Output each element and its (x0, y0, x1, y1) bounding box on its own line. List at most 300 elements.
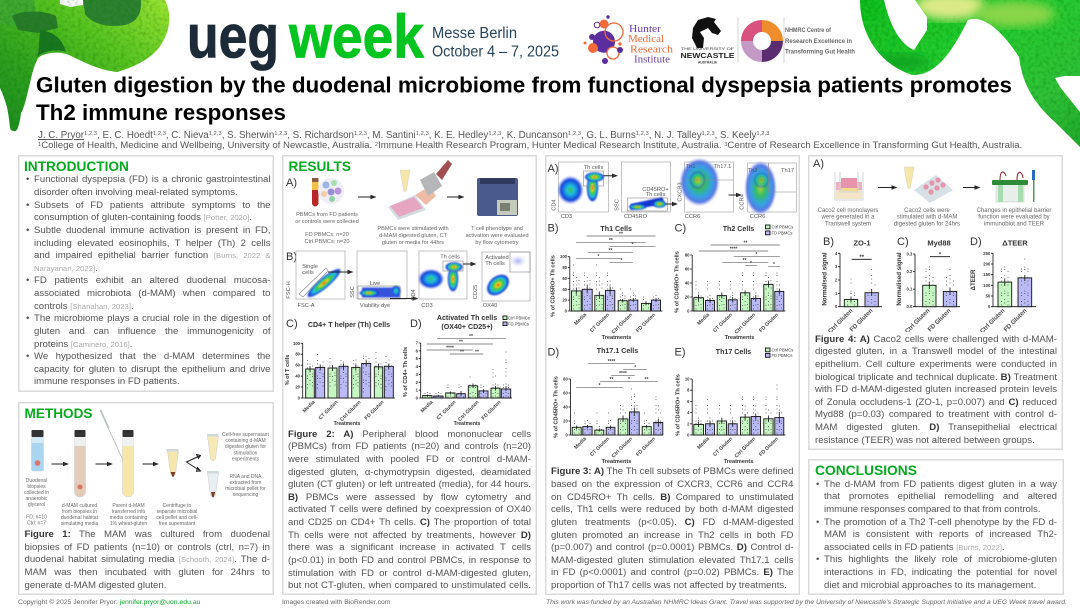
arrow (358, 196, 375, 198)
label: parent d-MAM: Parent d-MAM (112, 503, 144, 509)
bar chart: Th2 cells: CT Gluten (712, 312, 733, 334)
panel label B: B) (547, 222, 558, 234)
bar chart: Th2 cells: Treatments (724, 335, 754, 341)
bar chart: ZO-1: 3 (835, 264, 838, 269)
panel: figure 4 (808, 155, 1063, 450)
panel label B: B) (286, 251, 297, 263)
bar chart: Th17.1 cells (553, 347, 662, 465)
flow plot: live cells: SSC (350, 286, 356, 298)
text block: introduction bullets: proteins [Caminero, 2016]. (34, 339, 132, 350)
bar chart: Th17 cells: FD Gluten (758, 436, 779, 458)
bar chart: Th2 cells: FD Gluten (758, 312, 779, 334)
flow plot: SSC vs CD45RO (614, 162, 670, 220)
bar chart: delta TEER: 100 (983, 283, 991, 288)
bar chart: Th2 cells: 40 (684, 280, 690, 286)
bar chart: delta TEER: 150 (983, 272, 991, 277)
flow plot: CD4 vs CD3: CD4 (551, 199, 557, 211)
label: parent d-MAM: 1% wheat-gluten (109, 521, 147, 527)
flow plot: single cells (286, 251, 345, 309)
bar chart: ZO-1: Normalised signal (822, 252, 829, 306)
panel label B: B) (823, 236, 834, 248)
text block: figure 3 caption: on CD45RO+ Th cells. B) Compared to unstimulated (551, 492, 794, 503)
bar chart: CD4+ T helper cells: CT Gluten (318, 400, 339, 421)
logo: University of Newcastle: AUSTRALIA (698, 60, 718, 64)
label: biopsies: Duodenal (25, 478, 47, 484)
bar chart: activated Th cells: ** (469, 334, 473, 340)
arrow (463, 262, 475, 266)
panel label A: A) (813, 158, 824, 170)
text block: introduction bullets: Functional dyspepsia (FD) is a chronic gastrointestinal (34, 174, 270, 185)
bar chart: Th17.1 cells: ** (609, 377, 613, 383)
bar chart: activated Th cells: ** (460, 350, 464, 356)
bar chart: CD4+ T helper cells: Ctrl Gluten (339, 400, 362, 423)
bar chart: Th1 cells: * (631, 242, 633, 248)
bar chart: Th17 cells (675, 348, 785, 465)
text block: introduction bullets: immune responses in FD patients. (34, 376, 180, 387)
footer: copyright: Copyright © 2025 Jennifer Pryor: jennifer.pryor@uon.edu.au (18, 599, 200, 606)
logo: NHMRC Centre of Research Excellence: Research Excellence in (785, 38, 852, 45)
bar chart: Th2 cells: **** (729, 246, 737, 252)
arrow (390, 297, 417, 300)
text block: figure 2 caption: stimulation with FD or control d-MAM-digested gluten, (288, 568, 531, 579)
logo: NHMRC Centre of Research Excellence: NHMRC Centre of (785, 27, 832, 34)
flow plot: activated Th cells: OX40 (483, 303, 497, 309)
text block: introduction bullets: gluten and can influence the immunogenicity of (34, 326, 270, 337)
bar chart: Th1 cells: ** (608, 238, 612, 244)
bar chart: Myd88: 0.3 (906, 252, 913, 256)
text block: figure 3 caption: in FD (p<0.0001) and control (p=0.02) PBMCs. E) The (551, 567, 793, 578)
bar chart: Th2 cells: 20 (684, 294, 690, 300)
bar chart: activated Th cells: CT Gluten (436, 400, 457, 421)
bar chart: Th1 cells: 20 (562, 298, 567, 303)
flow plot: live cells: Live (370, 281, 380, 287)
text block: figure 3 caption: based on the expression of CXCR3, CCR6 and CCR4 (551, 479, 794, 490)
bar chart: Th2 cells: ** (743, 240, 747, 246)
affiliations: 1College of Health, Medicine and Wellbeing, University of Newcastle, Australia. 2Immune Health Research Program, Hunter Medical Research Institute, Australia. 3Centre of Research Excellence in Transforming Gut Health, Australia. (38, 140, 1022, 151)
bar chart: activated Th cells: **** (446, 346, 454, 352)
panel label C: C) (674, 222, 686, 234)
bar chart: delta TEER: 50 (986, 294, 991, 298)
bar chart: activated Th cells: Media (420, 400, 434, 414)
text block: figure 2 caption: (p<0.01) in both FD and control PBMCs, in response to (288, 555, 531, 566)
bar chart: activated Th cells: Ctrl Gluten (457, 400, 480, 423)
icon: biopsy vial (31, 430, 43, 471)
text block: figure 3 caption: gluten treatments (p<0.05). C) FD d-MAM-digested (551, 517, 794, 528)
bar chart: delta TEER: 250 (983, 251, 991, 256)
bar chart: ZO-1: 2 (835, 278, 838, 282)
arrow (878, 186, 896, 189)
bar chart: Th2 cells: ** (742, 258, 746, 264)
label: biopsies: biopsies (27, 484, 46, 490)
decorative green gut illustration: top left (0, 0, 169, 131)
bar chart: Th17.1 cells: Th17.1 Cells (596, 347, 638, 355)
icon: culture tube (74, 430, 85, 497)
flow plot: single cells: FSC-A (297, 303, 315, 309)
bar chart: Th17.1 cells: CT Gluten (589, 436, 610, 458)
text block: introduction bullets: Subtle duodenal immune activation is present in FD, (34, 225, 270, 236)
text: stimulation: PBMCs were stimulated with (377, 226, 449, 232)
text block: introduction bullets: We hypothesized that the d-MAM determines the (34, 351, 270, 362)
panel label C: C) (286, 318, 298, 330)
icon: centrifuge tube (166, 449, 178, 477)
bar chart: activated Th cells (403, 314, 512, 427)
flow plot: live cells: Viability dye (360, 303, 390, 309)
text block: conclusion bullets: diet and microbial approaches to its management. (824, 580, 1036, 591)
figure 4 graphics (813, 158, 1052, 332)
text: Caco2 stimulation: digested gluten for 24hrs (894, 222, 960, 228)
text: barrier function (977, 208, 1051, 228)
text block: figure 2 caption: B) PBMCs were assessed by flow cytometry and (288, 492, 531, 503)
label: sequencing: microbial pellet for (225, 486, 266, 492)
bar chart: ZO-1: 1 (835, 291, 838, 296)
bar chart: activated Th cells: 3 (416, 372, 419, 377)
label: centrifuge: separate microbial (156, 509, 197, 515)
logo: Hunter Medical Research Institute: Institute (634, 54, 670, 66)
text block: conclusion bullets: MAM is consistent with reports of increased Th2- (824, 529, 1057, 540)
arrow (447, 196, 463, 198)
text block: figure 2 caption: and CD25 on CD4+ Th cells. C) The proportion of total (288, 517, 531, 528)
decorative green gut illustration: top right (855, 0, 1080, 150)
bar chart: activated Th cells: 5 (416, 356, 419, 361)
text block: introduction bullets: associated microbiota (d-MAM) when compared to (34, 288, 270, 299)
text block: figure 1 caption: MAM was then incubated with gluten for 24hrs to (24, 567, 270, 578)
text block: figure 1 caption (24, 529, 270, 590)
arrow (142, 462, 157, 466)
flow plot: activated Th cells: CD25 (473, 285, 479, 299)
text block: introduction bullets: The microbiome plays a crucial role in the digestion of (34, 313, 270, 324)
flow plot: CXCR3 vs CCR6: CXCR3 (677, 182, 683, 202)
text block: figure 4 caption: with FD d-MAM-digested gluten increased protein levels (815, 384, 1057, 395)
text: PBMCs collected: or controls were collected (295, 219, 359, 225)
flow plot: single cells: cells (302, 270, 314, 276)
arrow (665, 202, 676, 206)
text: PBMCs collected: PBMCs from FD patients (296, 212, 358, 218)
icon: blood tube and PBMCs (312, 178, 344, 206)
bar chart: Th1 cells: % of CD45RO+ Th cells (550, 255, 556, 317)
text: Caco2 monolayers: were generated in a (820, 215, 875, 221)
flow plot: SSC vs CD45RO: CD45RO+ (642, 187, 669, 193)
text block: figure 2 caption (288, 429, 531, 591)
text: PBMCs collected: Ctrl PBMCs: n=20 (305, 239, 349, 245)
label: centrifuge (156, 503, 197, 527)
text block: figure 3 caption: (p=0.007) and control (p=0.0001) PBMCs. D) Control d- (551, 542, 793, 553)
bar chart: Myd88 (896, 238, 960, 335)
flow plot: CXCR3 vs CCR6: CCR6 (684, 214, 700, 220)
bar chart: Th17 cells: 0 (687, 432, 690, 438)
legend: Ctrl PBMCs (771, 348, 793, 353)
title: Gluten digestion by the duodenal microbiome from functional dyspepsia patients promotes (36, 73, 1012, 98)
bar chart: Th2 cells: Media (696, 312, 710, 327)
bar chart: Th1 cells: Media (573, 312, 587, 327)
flow plot: Th cells: Th cells (440, 254, 460, 260)
panel: methods (18, 402, 274, 594)
arrows: fork to two products (186, 454, 200, 471)
text: PBMCs collected: FD PBMCs: n=20 (305, 232, 349, 238)
bar chart: CD4+ T helper cells: CD4+ T helper (Th) Cells (308, 321, 390, 329)
panel label A: A) (547, 163, 558, 175)
bar chart: activated Th cells: 1 (416, 388, 419, 393)
text: barrier function: function were evaluated by (978, 215, 1050, 221)
text: flow cytometry (465, 226, 529, 246)
flow plot: CCR4 vs CCR6: CCR4 (739, 194, 745, 210)
text block: figure 1 caption: biopsies of FD patients (n=10) or controls (ctrl, n=7) in (24, 542, 270, 553)
bar chart: Th17 cells: 4 (687, 410, 690, 415)
panel label A: A) (286, 177, 297, 189)
bar chart: Th17 cells: Media (696, 436, 710, 451)
bar chart: Th17.1 cells: 0 (565, 432, 568, 438)
text block: conclusion bullets: The d-MAM from FD patients digest gluten in a way (824, 479, 1057, 490)
label: parent d-MAM: transferred into (111, 509, 145, 515)
label: culture: simulating media (60, 521, 98, 527)
label: biopsies: collected in (23, 490, 49, 496)
bar chart: CD4+ T helper cells: 60 (295, 363, 301, 368)
bar chart: delta TEER: ΔTEER (1002, 238, 1028, 248)
label: biopsies (23, 478, 49, 526)
bar chart: Th17.1 cells: % of CD45RO+ Th cells (553, 376, 559, 438)
legend: FD PBMCs (508, 322, 529, 326)
text block: figure 2 caption: gluten (CT gluten) or left untreated (media), for 44 hours. (288, 479, 531, 490)
footer: funding: This work was funded by an Australian NHMRC Ideas Grant. Travel was supported by the University of Newcastle's Strategic Support Initiative and a UEG Week travel award. (546, 599, 1067, 606)
text block: introduction bullets: controls [Shanahan, 2023]. (34, 301, 134, 312)
text block: figure 4 caption (815, 334, 1057, 446)
logo: UEG Week: week (288, 2, 424, 70)
text block: figure 2 caption: Th cells were not affected by treatments, however D) (288, 530, 531, 541)
bar chart: Th2 cells: Th2 Cells (722, 225, 754, 233)
bar chart: Th2 cells: 80 (684, 252, 690, 258)
panel label C: C) (897, 236, 909, 248)
label: culture (60, 503, 98, 527)
flow plot: CXCR3 vs CCR6: Th1 (685, 164, 695, 170)
flow plot: CD4 vs CD3: Th cells (583, 165, 603, 171)
text block: figure 3 caption (551, 466, 794, 591)
logo: Hunter Medical Research Institute: Research (630, 44, 674, 56)
bar chart: Th17 cells: % of CD45RO+ Th cells (675, 374, 681, 436)
bar chart: ZO-1 (822, 238, 882, 335)
bar chart: Th17.1 cells: 60 (563, 390, 568, 396)
bar chart: Th1 cells (550, 225, 662, 341)
bar chart: Th17.1 cells: ** (644, 377, 648, 383)
bar chart: activated Th cells: 7 (416, 340, 419, 346)
flow plot: CXCR3 vs CCR6: Th17.1 (713, 164, 731, 170)
label: sequencing: sequencing (232, 492, 258, 498)
bar chart: Th1 cells: 0 (564, 308, 567, 314)
flow plot: CD4 vs CD3 (551, 162, 608, 220)
flow plot: activated Th cells (473, 252, 530, 309)
bar chart: Th17.1 cells: * (598, 383, 600, 389)
bar chart: Myd88: 0.2 (906, 269, 913, 274)
bar chart: activated Th cells: Treatments (454, 421, 481, 427)
text: flow cytometry: T cell phenotype and (471, 226, 523, 232)
logo: NHMRC Centre of Research Excellence: Transforming Gut Health (785, 48, 855, 56)
bar chart: Th2 cells: 60 (684, 266, 690, 272)
bar chart: Myd88: * (939, 252, 942, 258)
text: Caco2 monolayers (818, 208, 878, 228)
text block: introduction bullets: consumption of gluten-containing foods [Potter, 2020]. (34, 212, 252, 223)
flow plot: SSC vs CD45RO: CD45RO (623, 214, 647, 220)
label: centrifuge: cell pellet and cell- (156, 515, 197, 521)
label: biopsies: FD: n=10 (26, 514, 47, 520)
text block: introduction bullets (26, 174, 271, 387)
bar chart: activated Th cells: ** (475, 350, 479, 356)
authors: J. C. Pryor1,2,3, E. C. Hoedt1,2,3, C. Nieva1,2,3, S. Sherwin1,2,3, S. Richardson1,2,3, M. Santini1,2,3, K. E. Hedley1,2,3, K. Duncanson1,2,3, G. L. Burns1,2,3, N. J. Talley1,2,3, S. Keely1,2,3 (38, 130, 769, 140)
logo: UEG Week: October 4 – 7, 2025 (432, 44, 559, 61)
bar chart: Th2 cells (674, 225, 785, 341)
logo: University of Newcastle (680, 17, 735, 64)
heading: methods: METHODS (24, 406, 92, 421)
bar chart: Th17 cells: CT Gluten (712, 436, 733, 458)
text block: introduction bullets: Narayanan, 2022]. (34, 263, 98, 274)
panel: results, figure 2 (282, 155, 537, 595)
heading: conclusions: CONCLUSIONS (815, 463, 917, 478)
label: biopsies: glycerol (27, 502, 45, 508)
text block: introduction bullets: capacity for gluten to disrupt the epithelium and drive (34, 364, 270, 375)
bar chart: Th2 cells: % of CD45RO+ Th cells (674, 251, 680, 313)
bar chart: activated Th cells: % of CD4+ Th cells (403, 347, 409, 397)
text: Caco2 stimulation: Caco2 cells were (904, 208, 951, 214)
legend: FD PBMCs (771, 231, 792, 236)
text block: conclusion bullets: associated cells in FD patients [Burns, 2022]. (824, 542, 1005, 553)
bar chart: CD4+ T helper cells: Treatments (334, 421, 361, 427)
figure 2 graphics (285, 160, 530, 427)
text block: figure 3 caption: proportion of Th17 cells was not affected by treatments. (551, 580, 787, 591)
label: sequencing (225, 474, 266, 498)
icon: supernatant tube (206, 434, 218, 461)
text block: figure 4 caption: Figure 4: A) Caco2 cells were challenged with d-MAM- (815, 334, 1057, 345)
flow plot: live cells (350, 251, 407, 309)
flow plot: CCR4 vs CCR6: Th17 (781, 168, 793, 174)
bar chart: ZO-1: ZO-1 (853, 238, 871, 248)
bar chart: Th17 cells: Treatments (723, 459, 753, 465)
label: biopsies: Ctrl: n=7 (26, 520, 46, 526)
text block: figure 1 caption: duodenal habitat simulating media [Schooth, 2024]. The d- (24, 554, 270, 565)
text block: figure 4 caption: epithelium. Cell culture experiments were conducted in (815, 359, 1057, 370)
legend (765, 348, 793, 358)
text block: introduction bullets: disorder often involving meal-related symptoms. (34, 187, 238, 198)
bar chart: Th2 cells: * (755, 252, 757, 258)
heading: results: RESULTS (288, 159, 351, 174)
text block: conclusion bullets (816, 479, 1057, 591)
bar chart: activated Th cells: (OX40+ CD25+) (441, 323, 493, 331)
text block: figure 2 caption: but not CT-gluten, when compared to unstimulated cells. (288, 580, 531, 591)
legend: Ctrl PBMCs (508, 316, 530, 320)
bar chart: Th17 cells: 6 (687, 399, 690, 404)
logo: UEG Week: ueg (187, 2, 279, 70)
text block: conclusion bullets: The promotion of a Th2 T-cell phenotype by the FD d- (824, 517, 1057, 528)
bar chart: Myd88: Myd88 (927, 238, 951, 248)
text block: introduction bullets: including elevated eosinophils, T helper (Th) 2 cells (34, 238, 270, 249)
bar chart: activated Th cells: ** (459, 340, 463, 346)
diagram: MAM culture workflow (23, 410, 269, 527)
text: stimulation: d-MAM digested gluten, CT (379, 233, 448, 239)
flow plot: activated Th cells: Th cells (485, 261, 505, 267)
arrow (51, 462, 67, 466)
bar chart: CD4+ T helper cells: FD Gluten (364, 400, 385, 421)
bar chart: Th17 cells: Th17 Cells (715, 348, 751, 356)
label: culture: duodenal habitat (61, 515, 98, 521)
bar chart: Th17.1 cells: FD Gluten (635, 436, 656, 458)
icon: tube and well plate (904, 167, 953, 203)
bar chart: CD4+ T helper cells: 40 (295, 374, 301, 379)
arrow (963, 186, 979, 189)
flow plot: Th cells: CD4 (411, 289, 417, 301)
bar chart: Th17.1 cells: 20 (563, 418, 568, 424)
bar chart: CD4+ T helper cells: % of T cells (285, 355, 291, 385)
title (36, 73, 1012, 125)
bar chart: Th2 cells: Ctrl Gluten (733, 312, 756, 335)
text block: figure 4 caption: resistance (TEER) was not altered between groups. (815, 435, 1035, 446)
text: Caco2 stimulation: stimulated with d-MAM (897, 215, 957, 221)
text: stimulation (377, 226, 449, 246)
text block: figure 2 caption: were stimulated with pooled FD or control d-MAM- (288, 454, 531, 465)
bar chart: Th1 cells: 100 (560, 254, 567, 259)
bar chart: Myd88: 0.0 (906, 304, 913, 309)
text: Caco2 stimulation (894, 208, 960, 228)
bar chart: CD4+ T helper cells (285, 321, 395, 427)
bar chart: Myd88: Normalised signal (896, 252, 903, 306)
bar chart: delta TEER: 200 (983, 262, 991, 266)
bar chart: Th17.1 cells: **** (619, 371, 626, 377)
bar chart: ZO-1: ** (859, 255, 865, 261)
icon: pellet tube (206, 471, 218, 498)
bar chart: CD4+ T helper cells: 80 (295, 352, 301, 357)
bar chart: Th2 cells: * (750, 261, 752, 267)
flow plot: CCR4 vs CCR6 (739, 161, 796, 220)
bar chart: Th17.1 cells: 80 (563, 376, 568, 382)
bar chart: delta TEER: 0 (988, 304, 991, 309)
bar chart: Th2 cells: 0 (687, 308, 690, 314)
text block: introduction bullets: Subsets of FD patients attribute symptoms to the (34, 200, 270, 211)
bar chart: delta TEER: ΔTEER (970, 269, 977, 290)
text block: figure 4 caption: digested gluten, in a Transwell model of the intestinal (815, 346, 1057, 357)
icon: Transwell (835, 172, 863, 200)
panel: conclusions (808, 459, 1064, 594)
arrow (328, 270, 352, 274)
bar chart: Th1 cells: CT Gluten (589, 312, 610, 334)
text block: figure 2 caption: digested gluten, α-chymotrypsin digested, deamidated (288, 467, 531, 478)
text: barrier function: Changes in epithelial barrier (977, 208, 1051, 214)
legend (765, 225, 793, 236)
text: flow cytometry: by flow cytometry (475, 240, 519, 246)
figure 3 graphics (547, 158, 797, 465)
bar chart: Th17 cells: 2 (687, 421, 690, 426)
bar chart: activated Th cells: FD Gluten (481, 400, 502, 421)
flow plot: single cells: Single (302, 264, 318, 270)
icon: gluten tube with needle (100, 410, 133, 497)
text block: figure 1 caption: generate d-MAM digested gluten. (24, 580, 166, 590)
text block: conclusion bullets: interactions in FD, indicating the potential for novel (824, 567, 1057, 578)
bar chart: CD4+ T helper cells: 0 (298, 396, 301, 400)
logo: Hunter Medical Research Institute: Medical (628, 34, 664, 45)
flow plot: SSC vs CD45RO: Th cells (645, 192, 665, 198)
arrow (728, 194, 740, 196)
heading: introduction: INTRODUCTION (24, 159, 129, 174)
bar chart: Th1 cells: * (597, 254, 599, 260)
flow plot: activated Th cells: Activated (485, 255, 509, 261)
logo: University of Newcastle: NEWCASTLE (680, 53, 735, 60)
label: centrifuge: free supernatant (158, 521, 195, 527)
logo: UEG Week (187, 2, 559, 70)
text: PBMCs collected (295, 212, 359, 245)
bar chart: ZO-1: 0 (835, 304, 838, 309)
flow plot: SSC vs CD45RO: SSC (614, 199, 620, 211)
text block: figure 2 caption: Figure 2: A) Peripheral blood mononuclear cells (288, 429, 531, 440)
icon: flow cytometer (477, 178, 518, 216)
label: supernatant: stimulation (233, 450, 257, 456)
logo: UEG Week: Messe Berlin (432, 25, 517, 42)
text block: figure 3 caption: MAM-digested gluten stimulation elevated Th17.1 cells (551, 555, 794, 566)
panel label E: E) (674, 346, 685, 358)
bar chart: Th1 cells: Treatments (601, 335, 631, 341)
